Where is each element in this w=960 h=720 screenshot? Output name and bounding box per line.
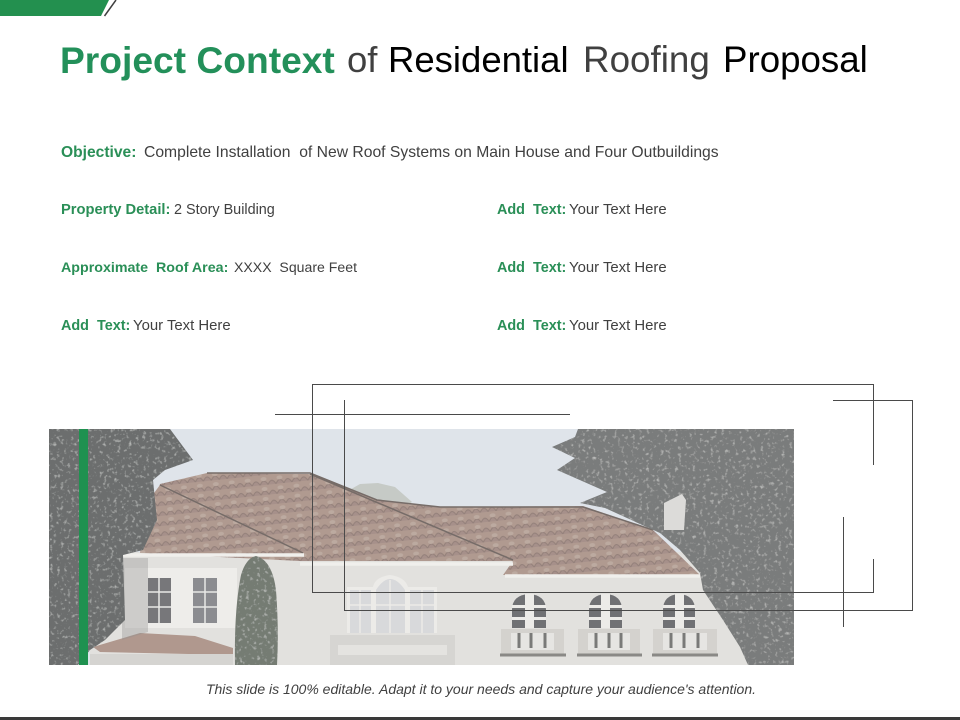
distant tree [352,483,412,503]
detail: add text right 2 [497,260,667,276]
lower left roof [93,633,233,655]
detail: add text right 1: Add Text: [497,202,566,218]
detail: add text right 3: Add Text: [497,318,566,334]
right arched windows [512,594,695,628]
detail: add text right 2: Your Text Here [569,260,667,276]
detail: add text right 3: Your Text Here [569,318,667,334]
left windows [148,568,237,628]
house photo [49,429,794,665]
title [60,39,868,81]
detail: add text right 3 [497,318,667,334]
detail: property: Property Detail: [61,202,170,218]
detail: add text left: Add Text: [61,318,130,334]
detail: add text right 1 [497,202,667,218]
centre window [347,575,437,633]
detail: add text right 2: Add Text: [497,260,566,276]
objective text: Objective: [61,144,136,161]
right tree [552,429,794,665]
detail: add text right 1: Your Text Here [569,202,667,218]
title: Roofing [583,39,710,80]
objective text: Complete Installation of New Roof Systems on Main House and Four Outbuildings [144,144,719,161]
left tree branches [122,558,148,640]
cypress [235,556,278,665]
detail: property: 2 Story Building [174,202,275,218]
footer note: This slide is 100% editable. Adapt it to your needs and capture your audience's attention. [206,681,756,697]
walls [90,552,750,665]
chimney [664,494,686,530]
detail: add text left: Your Text Here [133,318,231,334]
detail: property [61,202,275,218]
centre balcony [330,635,455,665]
title: Residential [388,39,569,80]
title: of [347,39,377,80]
bottom bar [0,717,960,720]
detail: add text left [61,318,231,334]
eaves [123,555,700,576]
detail: roof area [61,259,357,276]
top corner accent [0,0,116,16]
roofs [140,473,700,575]
balconies [501,629,717,655]
detail: roof area: XXXX Square Feet [234,259,357,275]
title: Proposal [723,39,868,80]
title: Project Context [60,39,335,81]
left tree [49,429,193,665]
detail: roof area: Approximate Roof Area: [61,260,228,276]
